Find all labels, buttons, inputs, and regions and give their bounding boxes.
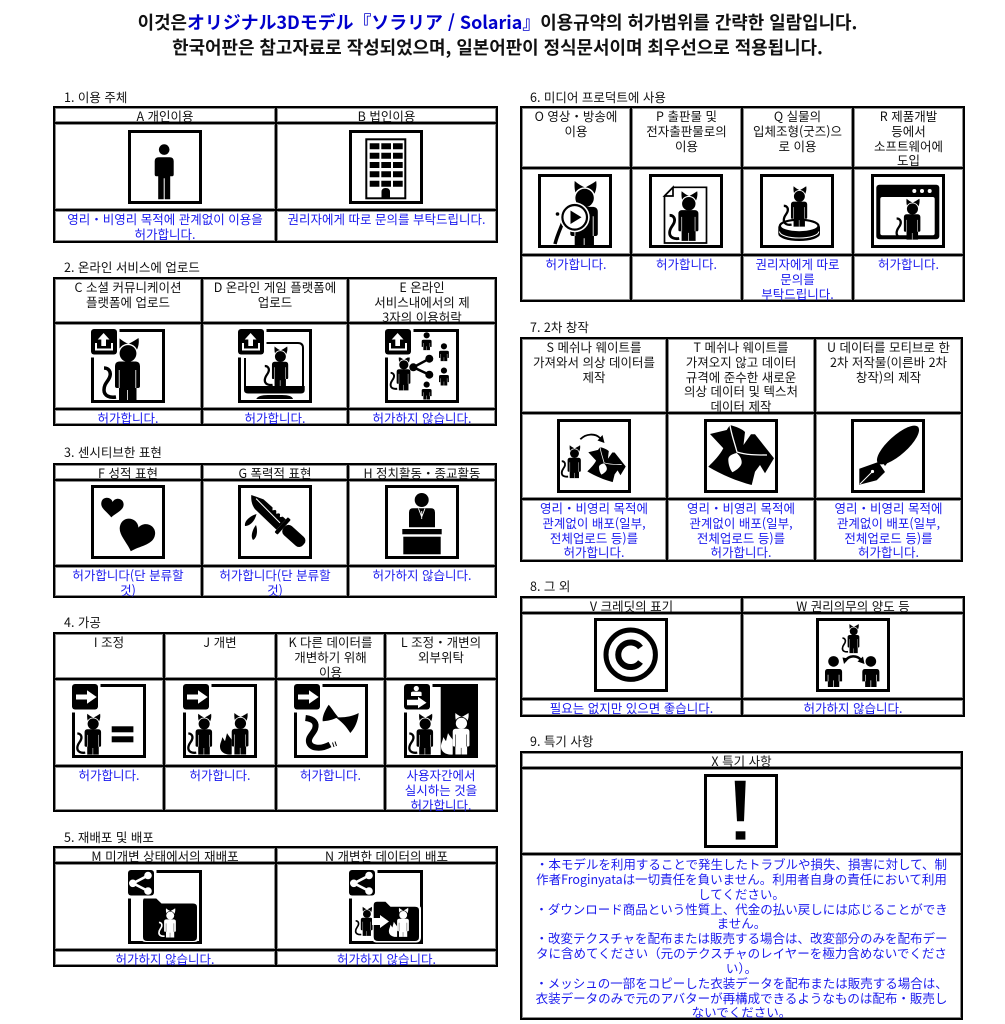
image cell U — [814, 412, 963, 500]
icon: adjust — [72, 684, 146, 758]
header A — [53, 106, 277, 124]
image cell I — [53, 678, 165, 767]
notes text: ・本モデルを利用することで発生したトラブルや損失、損害に対して、制 — [536, 854, 947, 873]
header P: 이용 — [675, 136, 698, 155]
status S: 허가합니다. — [564, 542, 624, 561]
status Q: 권리자에게 따로 — [755, 254, 840, 273]
status O: 허가합니다. — [546, 254, 606, 273]
heading: section 5: 5. 재배포 및 배포 — [64, 827, 154, 846]
image cell A — [53, 122, 277, 211]
header E — [347, 277, 497, 324]
header T: 데이터 제작 — [710, 396, 772, 415]
image cell N — [275, 862, 498, 951]
title: 한국어판은 참고자료로 작성되었으며, 일본어판이 정식문서이며 최우선으로 적용됩니다. — [172, 34, 823, 60]
header K — [275, 632, 386, 680]
header Q: 입체조형(굿즈)으 — [753, 121, 842, 140]
header U: 2차 저작물(이른바 2차 — [830, 352, 947, 371]
header C: C 소셜 커뮤니케이션 — [74, 277, 181, 296]
notes text: タに含めてください（元のテクスチャのレイヤーを極力含めないでくださ — [536, 943, 947, 962]
panel: section 1 usage subject — [53, 106, 498, 243]
icon: cat to clothing — [557, 419, 631, 493]
header S — [520, 337, 668, 414]
notes text: ・改変テクスチャを配布または販売する場合は、改変部分のみを配布デー — [535, 928, 948, 947]
status T: 영리・비영리 목적에 — [687, 498, 795, 517]
status E — [347, 408, 497, 426]
status J — [163, 765, 277, 812]
status N: 허가하지 않습니다. — [337, 949, 436, 968]
status L: 실시하는 것을 — [405, 780, 477, 799]
header S: 가져와서 의상 데이터를 — [533, 352, 655, 371]
icon: copyright — [594, 618, 668, 692]
status G — [201, 565, 349, 598]
status G: 것) — [267, 580, 283, 599]
icon: fountain pen — [851, 419, 925, 493]
status U: 전체업로드 등)를 — [844, 528, 933, 547]
status W: 허가하지 않습니다. — [804, 698, 902, 717]
header F — [53, 463, 203, 481]
header X: X 특기 사항 — [711, 751, 772, 770]
header D — [201, 277, 349, 324]
heading: section 3: 3. 센시티브한 표현 — [64, 442, 162, 461]
heading: section 1: 1. 이용 주체 — [64, 87, 127, 106]
icon: exclamation mark — [704, 774, 778, 848]
header R: 등에서 — [891, 121, 926, 140]
image cell P — [630, 167, 743, 256]
notes text: い）。 — [726, 958, 757, 977]
header D: 업로드 — [258, 292, 292, 311]
header K: K 다른 데이터를 — [288, 632, 373, 651]
status B — [275, 209, 498, 243]
icon: outsourcing — [404, 684, 478, 758]
status E: 허가하지 않습니다. — [372, 408, 472, 427]
header U: U 데이터를 모티브로 한 — [827, 337, 950, 356]
status U: 영리・비영리 목적에 — [834, 498, 942, 517]
header J — [163, 632, 277, 680]
status O — [520, 254, 632, 302]
header P: P 출판물 및 — [656, 106, 717, 125]
status U: 관계없이 배포(일부, — [837, 513, 940, 532]
status K — [275, 765, 386, 812]
status B: 권리자에게 따로 문의를 부탁드립니다. — [288, 209, 486, 228]
status N — [275, 949, 498, 967]
notes text: 作者Froginyataは一切責任を負いません。利用者自身の責任において利用 — [536, 869, 947, 888]
status C: 허가합니다. — [98, 408, 158, 427]
header T: 의상 데이터 및 텍스처 — [684, 381, 798, 400]
image cell G — [201, 479, 349, 567]
status U — [814, 498, 963, 562]
image cell E — [347, 322, 497, 410]
header E: 서비스내에서의 제 — [374, 292, 470, 311]
panel: section 5 redistribution — [53, 846, 498, 968]
notes text: ないでください。 — [692, 1002, 791, 1021]
header V — [520, 596, 743, 614]
image cell M — [53, 862, 277, 951]
header D: D 온라인 게임 플랫폼에 — [214, 277, 336, 296]
status I — [53, 765, 165, 812]
status Q: 문의를 — [780, 269, 815, 288]
header R — [852, 106, 965, 169]
header K: 개변하기 위해 — [294, 647, 367, 666]
image cell S — [520, 412, 668, 500]
status P: 허가합니다. — [656, 254, 717, 273]
panel: section 2 online upload — [53, 277, 497, 427]
image cell R — [852, 167, 965, 256]
header T: 규격에 준수한 새로운 — [686, 367, 796, 386]
header R: 소프트웨어에 — [874, 136, 943, 155]
header M: M 미개변 상태에서의 재배포 — [91, 846, 239, 865]
status D: 허가합니다. — [244, 408, 306, 427]
image cell Q — [741, 167, 854, 256]
image cell D — [201, 322, 349, 410]
header R: R 제품개발 — [880, 106, 937, 125]
panel: section 6 media products — [520, 106, 965, 303]
status W — [741, 698, 965, 717]
heading: section 7: 7. 2차 창작 — [530, 317, 589, 336]
heading: section 8: 8. 그 외 — [530, 576, 570, 595]
status D — [201, 408, 349, 426]
status J: 허가합니다. — [190, 765, 250, 784]
status P — [630, 254, 743, 302]
header T: 가져오지 않고 데이터 — [686, 352, 796, 371]
status R: 허가합니다. — [878, 254, 939, 273]
header T — [666, 337, 816, 414]
header U — [814, 337, 963, 414]
heading: section 4: 4. 가공 — [64, 612, 101, 631]
status H — [347, 565, 497, 598]
icon: person — [128, 130, 202, 204]
status G: 허가합니다(단 분류할 — [219, 565, 331, 584]
status F — [53, 565, 203, 598]
title: 이것은オリジナル3Dモデル『ソラリア / Solaria』이용규약의 허가범위를 간략한 일람입니다. — [138, 9, 857, 35]
notes text: ・ダウンロード商品という性質上、代金の払い戻しには応じることができ — [535, 899, 948, 918]
status R — [852, 254, 965, 302]
image cell F — [53, 479, 203, 567]
status K: 허가합니다. — [300, 765, 361, 784]
image cell T — [666, 412, 816, 500]
notes text: ません。 — [717, 913, 766, 932]
header V: V 크레딧의 표기 — [590, 596, 673, 615]
header O: 이용 — [564, 121, 588, 140]
icon: share folder — [128, 870, 202, 944]
image cell B — [275, 122, 498, 211]
image cell H — [347, 479, 497, 567]
status T — [666, 498, 816, 562]
icon: cat upload — [91, 329, 165, 403]
header F: F 성적 표현 — [98, 463, 158, 482]
header O: O 영상・방송에 — [535, 106, 617, 125]
panel: section 9 special notes — [520, 751, 963, 1021]
header L: 외부위탁 — [418, 647, 464, 666]
status M: 허가하지 않습니다. — [116, 949, 214, 968]
heading: section 2: 2. 온라인 서비스에 업로드 — [64, 257, 200, 276]
status U: 허가합니다. — [858, 542, 919, 561]
header M — [53, 846, 277, 864]
header G — [201, 463, 349, 481]
icon: cat on monitor upload — [238, 329, 312, 403]
status S: 영리・비영리 목적에 — [540, 498, 648, 517]
header L: L 조정・개변의 — [401, 632, 481, 651]
status S: 관계없이 배포(일부, — [542, 513, 646, 532]
status S — [520, 498, 668, 562]
status L: 허가합니다. — [410, 795, 472, 814]
heading: section 6: 6. 미디어 프로덕트에 사용 — [530, 87, 666, 106]
header A: A 개인이용 — [136, 106, 194, 125]
heading: section 9: 9. 특기 사항 — [530, 731, 593, 750]
icon: hearts — [91, 485, 165, 559]
header K: 이용 — [319, 662, 342, 681]
header I: I 조정 — [94, 632, 124, 651]
status I: 허가합니다. — [78, 765, 140, 784]
header N: N 개변한 데이터의 배포 — [325, 846, 448, 865]
icon: software window — [871, 174, 945, 248]
icon: politician at podium — [385, 485, 459, 559]
status V: 필요는 없지만 있으면 좋습니다. — [550, 698, 713, 717]
header B: B 법인이용 — [358, 106, 415, 125]
status F: 허가합니다(단 분류할 — [72, 565, 184, 584]
header E: E 온라인 — [399, 277, 445, 296]
image cell O — [520, 167, 632, 256]
header P — [630, 106, 743, 169]
notes text: 衣装データのみで元のアバターが再構成できるようなものは配布・販売し — [536, 988, 947, 1007]
header S: S 메쉬나 웨이트를 — [547, 337, 641, 356]
image cell W — [741, 612, 965, 700]
status Q: 부탁드립니다. — [761, 284, 834, 303]
icon: knife — [238, 485, 312, 559]
notes text: ・メッシュの一部をコピーした衣装データを配布または販売する場合は、 — [535, 973, 948, 992]
header L — [384, 632, 498, 680]
header W: W 권리의무의 양도 등 — [796, 596, 910, 615]
header I — [53, 632, 165, 680]
status A — [53, 209, 277, 243]
panel: section 4 processing — [53, 632, 498, 814]
image cell L — [384, 678, 498, 767]
header C — [53, 277, 203, 324]
icon: building — [349, 130, 423, 204]
header U: 창작)의 제작 — [856, 367, 921, 386]
panel: section 3 sensitive expression — [53, 463, 497, 599]
header O — [520, 106, 632, 169]
status C — [53, 408, 203, 426]
status F: 것) — [120, 580, 136, 599]
header H: H 정치활동・종교활동 — [363, 463, 481, 482]
header Q: 로 이용 — [778, 136, 816, 155]
icon: rights transfer — [816, 618, 890, 692]
status T: 허가합니다. — [710, 542, 772, 561]
status Q — [741, 254, 854, 302]
panel: section 8 others — [520, 596, 965, 717]
header Q: Q 실물의 — [774, 106, 821, 125]
status S: 전체업로드 등)를 — [550, 528, 638, 547]
notes text: してください。 — [698, 884, 785, 903]
header T: T 메쉬나 웨이트를 — [694, 337, 788, 356]
header S: 제작 — [582, 367, 606, 386]
panel: section 7 derivative works — [520, 337, 963, 562]
header R: 도입 — [897, 150, 920, 169]
icon: share modified folder — [349, 870, 423, 944]
image cell V — [520, 612, 743, 700]
icon: figure on pedestal — [760, 174, 834, 248]
header E: 3자의 이용허락 — [382, 307, 462, 326]
status H: 허가하지 않습니다. — [372, 565, 472, 584]
icon: clothing — [704, 419, 778, 493]
icon: video — [538, 174, 612, 248]
status A: 영리・비영리 목적에 관계없이 이용을 — [67, 209, 263, 228]
header P: 전자출판물로의 — [646, 121, 727, 140]
status T: 관계없이 배포(일부, — [689, 513, 793, 532]
header C: 플랫폼에 업로드 — [86, 292, 170, 311]
image cell X — [520, 767, 963, 855]
image cell J — [163, 678, 277, 767]
icon: publication — [649, 174, 723, 248]
notes text — [520, 853, 963, 1020]
icon: cat sharing to people — [385, 329, 459, 403]
icon: modify — [183, 684, 257, 758]
image cell K — [275, 678, 386, 767]
header N — [275, 846, 498, 864]
status M — [53, 949, 277, 967]
status A: 허가합니다. — [134, 224, 196, 243]
header Q — [741, 106, 854, 169]
header B — [275, 106, 498, 124]
status T: 전체업로드 등)를 — [697, 528, 785, 547]
title — [138, 9, 857, 60]
header W — [741, 596, 965, 614]
image cell C — [53, 322, 203, 410]
status L — [384, 765, 498, 812]
status L: 사용자간에서 — [406, 765, 476, 784]
header J: J 개변 — [203, 632, 237, 651]
header G: G 폭력적 표현 — [238, 463, 312, 482]
icon: tail and bow parts — [294, 684, 368, 758]
header X — [520, 751, 963, 769]
